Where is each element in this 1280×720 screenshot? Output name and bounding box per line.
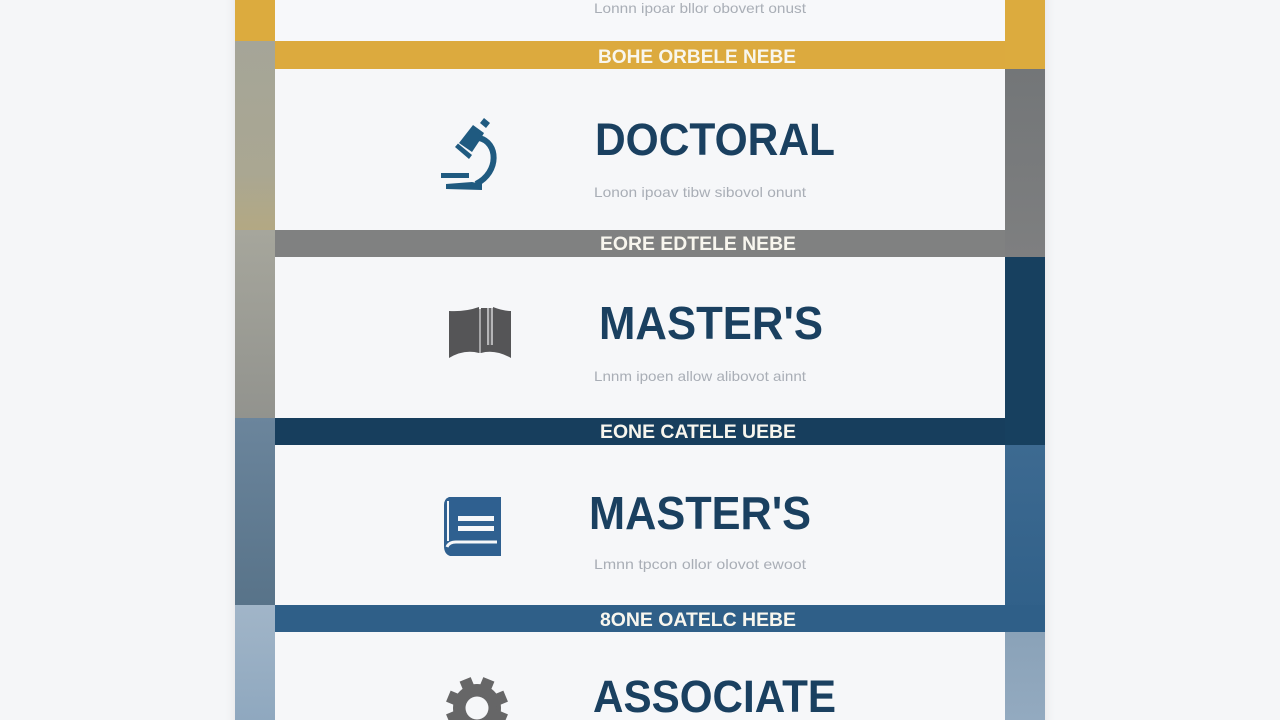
- banner: grey: [275, 230, 1005, 257]
- description text: Lonon ipoav tibw sibovol onunt: [594, 184, 806, 200]
- banner: gold: BOHE ORBELE NEBE: [598, 47, 796, 68]
- icon: closed book: [444, 497, 501, 556]
- soft outer shadow: [235, 0, 1045, 720]
- panel: top partial level: [275, 0, 1005, 41]
- panel: master's one: [275, 257, 1005, 418]
- banner: grey: EORE EDTELE NEBE: [600, 234, 796, 255]
- icon: microscope: [441, 118, 494, 190]
- banner: gold: [275, 41, 1005, 69]
- icon: gear: [446, 677, 508, 720]
- heading: master's: MASTER'S: [599, 297, 823, 349]
- banner: mid blue: [275, 605, 1045, 632]
- right colour strip: [1005, 0, 1045, 720]
- heading: doctoral: DOCTORAL: [595, 114, 835, 165]
- panel: master's two: [275, 445, 1005, 605]
- banner: navy: [275, 418, 1005, 445]
- description text: Lmnn tpcon ollor olovot ewoot: [594, 556, 806, 572]
- icon: open book: [449, 307, 511, 358]
- description text: Lonnn ipoar bllor obovert onust: [594, 0, 806, 16]
- left colour strip: [235, 0, 275, 720]
- banner: navy: EONE CATELE UEBE: [600, 422, 796, 443]
- panel: associate: [275, 632, 1005, 720]
- heading: master's: MASTER'S: [589, 487, 811, 539]
- panel: doctoral: [275, 69, 1005, 230]
- banner: mid blue: 8ONE OATELC HEBE: [600, 610, 796, 631]
- description text: Lnnm ipoen allow alibovot ainnt: [594, 368, 806, 384]
